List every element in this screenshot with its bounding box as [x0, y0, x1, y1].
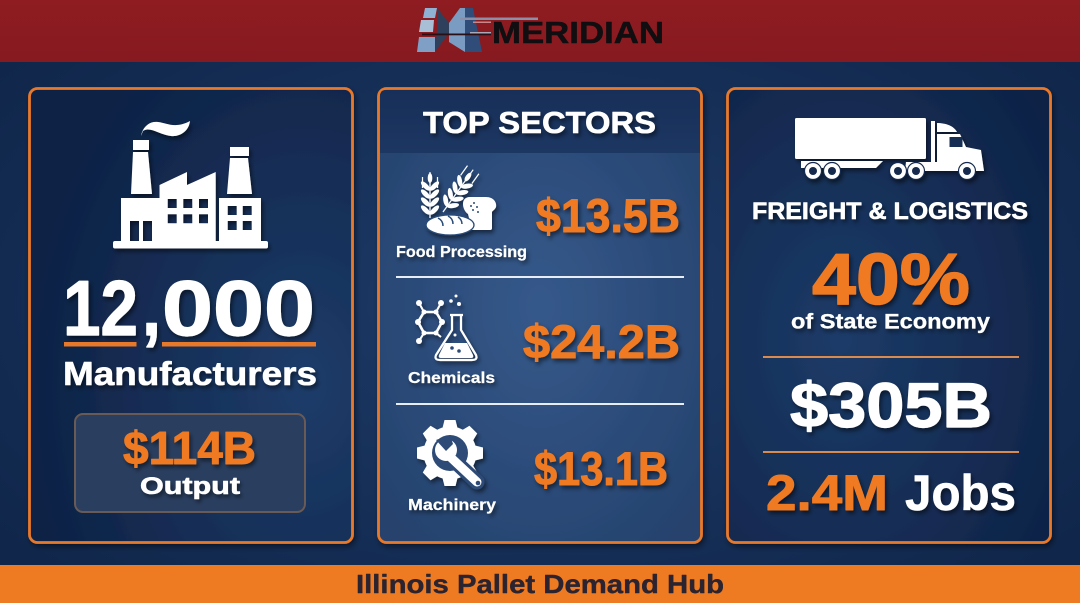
output box: [75, 414, 305, 512]
value: 40%: 40%: [812, 240, 970, 320]
stat: 12,000: [63, 264, 315, 352]
heading: top sectors: TOP SECTORS: [423, 105, 656, 140]
value: 2.4M jobs: 2.4M: [766, 465, 888, 521]
icon: food: [420, 164, 496, 235]
panel: manufacturers: [30, 88, 352, 542]
label: chemicals: Chemicals: [408, 370, 495, 387]
label: machinery: Machinery: [408, 497, 496, 514]
header band with logo: [0, 0, 1080, 62]
panel: freight and logistics: [728, 88, 1050, 542]
value: 2.4M jobs: [766, 465, 1016, 521]
footer band: [0, 565, 1080, 603]
panel: top sectors: [378, 88, 702, 542]
footer title: Illinois Pallet Demand Hub: [356, 569, 724, 599]
icon: truck: [795, 118, 984, 180]
stat: 12,000: 000: [162, 264, 315, 352]
stat: 12,000: 12: [63, 264, 138, 352]
stat: 12,000: ,: [142, 264, 161, 352]
heading band: [380, 90, 700, 153]
icon: factory: [113, 121, 268, 248]
label: output: Output: [140, 473, 240, 500]
icon: machinery: [417, 420, 483, 486]
value: $13.1B: $13.1B: [534, 442, 668, 495]
value: $114B: $114B: [123, 422, 256, 474]
value: $305B: $305B: [790, 371, 992, 441]
underline: [64, 342, 316, 346]
label: of state economy: of State Economy: [791, 310, 990, 334]
label: food processing: Food Processing: [396, 244, 527, 261]
value: 2.4M jobs: Jobs: [905, 465, 1016, 521]
icon: chemicals: [415, 294, 476, 360]
logo wordmark: MERIDIAN: [492, 15, 664, 50]
heading: freight and logistics: FREIGHT & LOGISTICS: [752, 198, 1028, 225]
logo mark: [417, 8, 538, 52]
value: $24.2B: $24.2B: [523, 315, 680, 368]
value: $13.5B: $13.5B: [536, 189, 680, 242]
label: manufacturers: Manufacturers: [63, 355, 317, 392]
